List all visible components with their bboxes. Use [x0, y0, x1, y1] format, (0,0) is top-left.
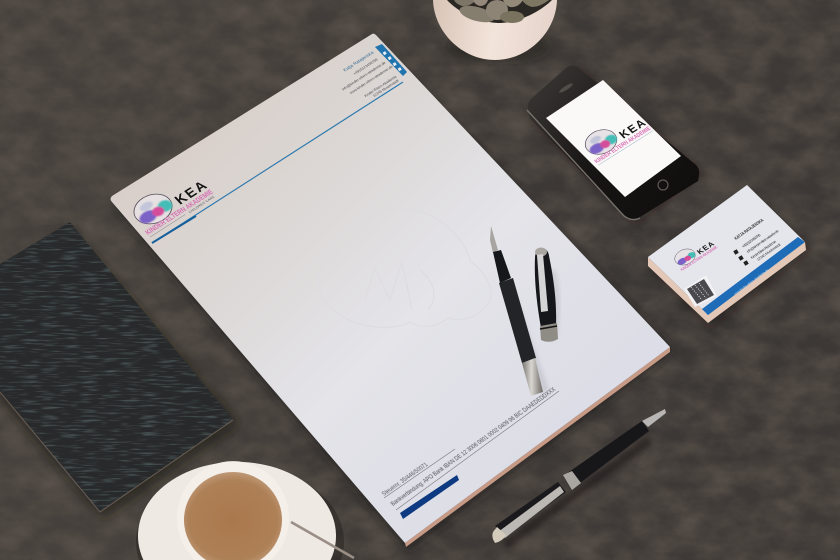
card contact details: Kinder Eltern Akademie: [750, 240, 777, 260]
ballpoint pen: [492, 409, 666, 545]
letterhead KEA logo: KEA: [171, 178, 210, 207]
card KEA logo: KEA: [695, 239, 717, 256]
footer bank details: Bankverbindung: APO Bank IBAN DE 12 3006 0601 0002 0409 96 BIC DAAEDEDDXXX: [390, 386, 558, 507]
card contact details: [733, 217, 782, 266]
card contact details: 12345 Musterstadt: [756, 242, 782, 262]
header contact text: Kinder Eltern Akademie: [363, 75, 398, 98]
letterhead KEA logo: [124, 168, 217, 239]
notebook: black leather: [0, 222, 240, 520]
footer tax number: Steuernr. 35/446/50071: [381, 461, 430, 497]
header contact text: info@kinder-eltern-akademie.de: [341, 61, 387, 91]
phone KEA logo: KINDER ELTERN AKADEMIE: [593, 125, 653, 165]
spoon: [291, 522, 354, 558]
phone KEA logo: [577, 108, 653, 165]
saucer: [136, 462, 344, 560]
header contact text: Katja Ratajenska: [342, 50, 375, 72]
watermark: [319, 209, 491, 327]
card contact details: KATJA RATAJENSKA: [733, 217, 765, 241]
header contact text: 12345 Musterstadt: [372, 79, 400, 98]
coffee cup on saucer: [136, 461, 354, 560]
card blue band: www.kinder-eltern-akademie.de: [733, 268, 769, 296]
header contact text: [341, 50, 400, 98]
business card stack: [648, 185, 811, 328]
letterhead KEA logo: KINDER ELTERN AKADEMIE: [143, 188, 215, 236]
smartphone: [527, 66, 703, 224]
card contact details: +4915123456789: [741, 233, 762, 249]
blue header rule: [152, 82, 403, 243]
letterhead paper: [110, 34, 676, 552]
header contact text: +4915123456789: [352, 58, 379, 76]
phone KEA logo: KEA: [617, 117, 649, 141]
phone screen: [546, 80, 681, 197]
card QR code: [684, 275, 717, 307]
fountain pen: [490, 226, 546, 396]
footer blue bar: [400, 475, 459, 519]
card KEA logo: [669, 234, 719, 272]
card contact details: info@kinder-eltern-akademie: [746, 229, 780, 254]
succulent leaves: [447, 0, 552, 25]
fountain pen cap: [535, 248, 560, 342]
coffee surface: [184, 472, 282, 560]
cup rim: [177, 461, 289, 560]
corner tab: contact icons: [375, 44, 407, 76]
plant pot with succulent: [433, 0, 557, 60]
letterhead KEA logo: CHILDREN CARE: [188, 195, 216, 214]
card blue band: [702, 237, 805, 315]
header contact text: www.kinder-eltern-akademie.de: [349, 65, 394, 95]
card KEA logo: KINDER ELTERN AKADEMIE: [679, 245, 719, 272]
footer bank details: [390, 386, 559, 510]
